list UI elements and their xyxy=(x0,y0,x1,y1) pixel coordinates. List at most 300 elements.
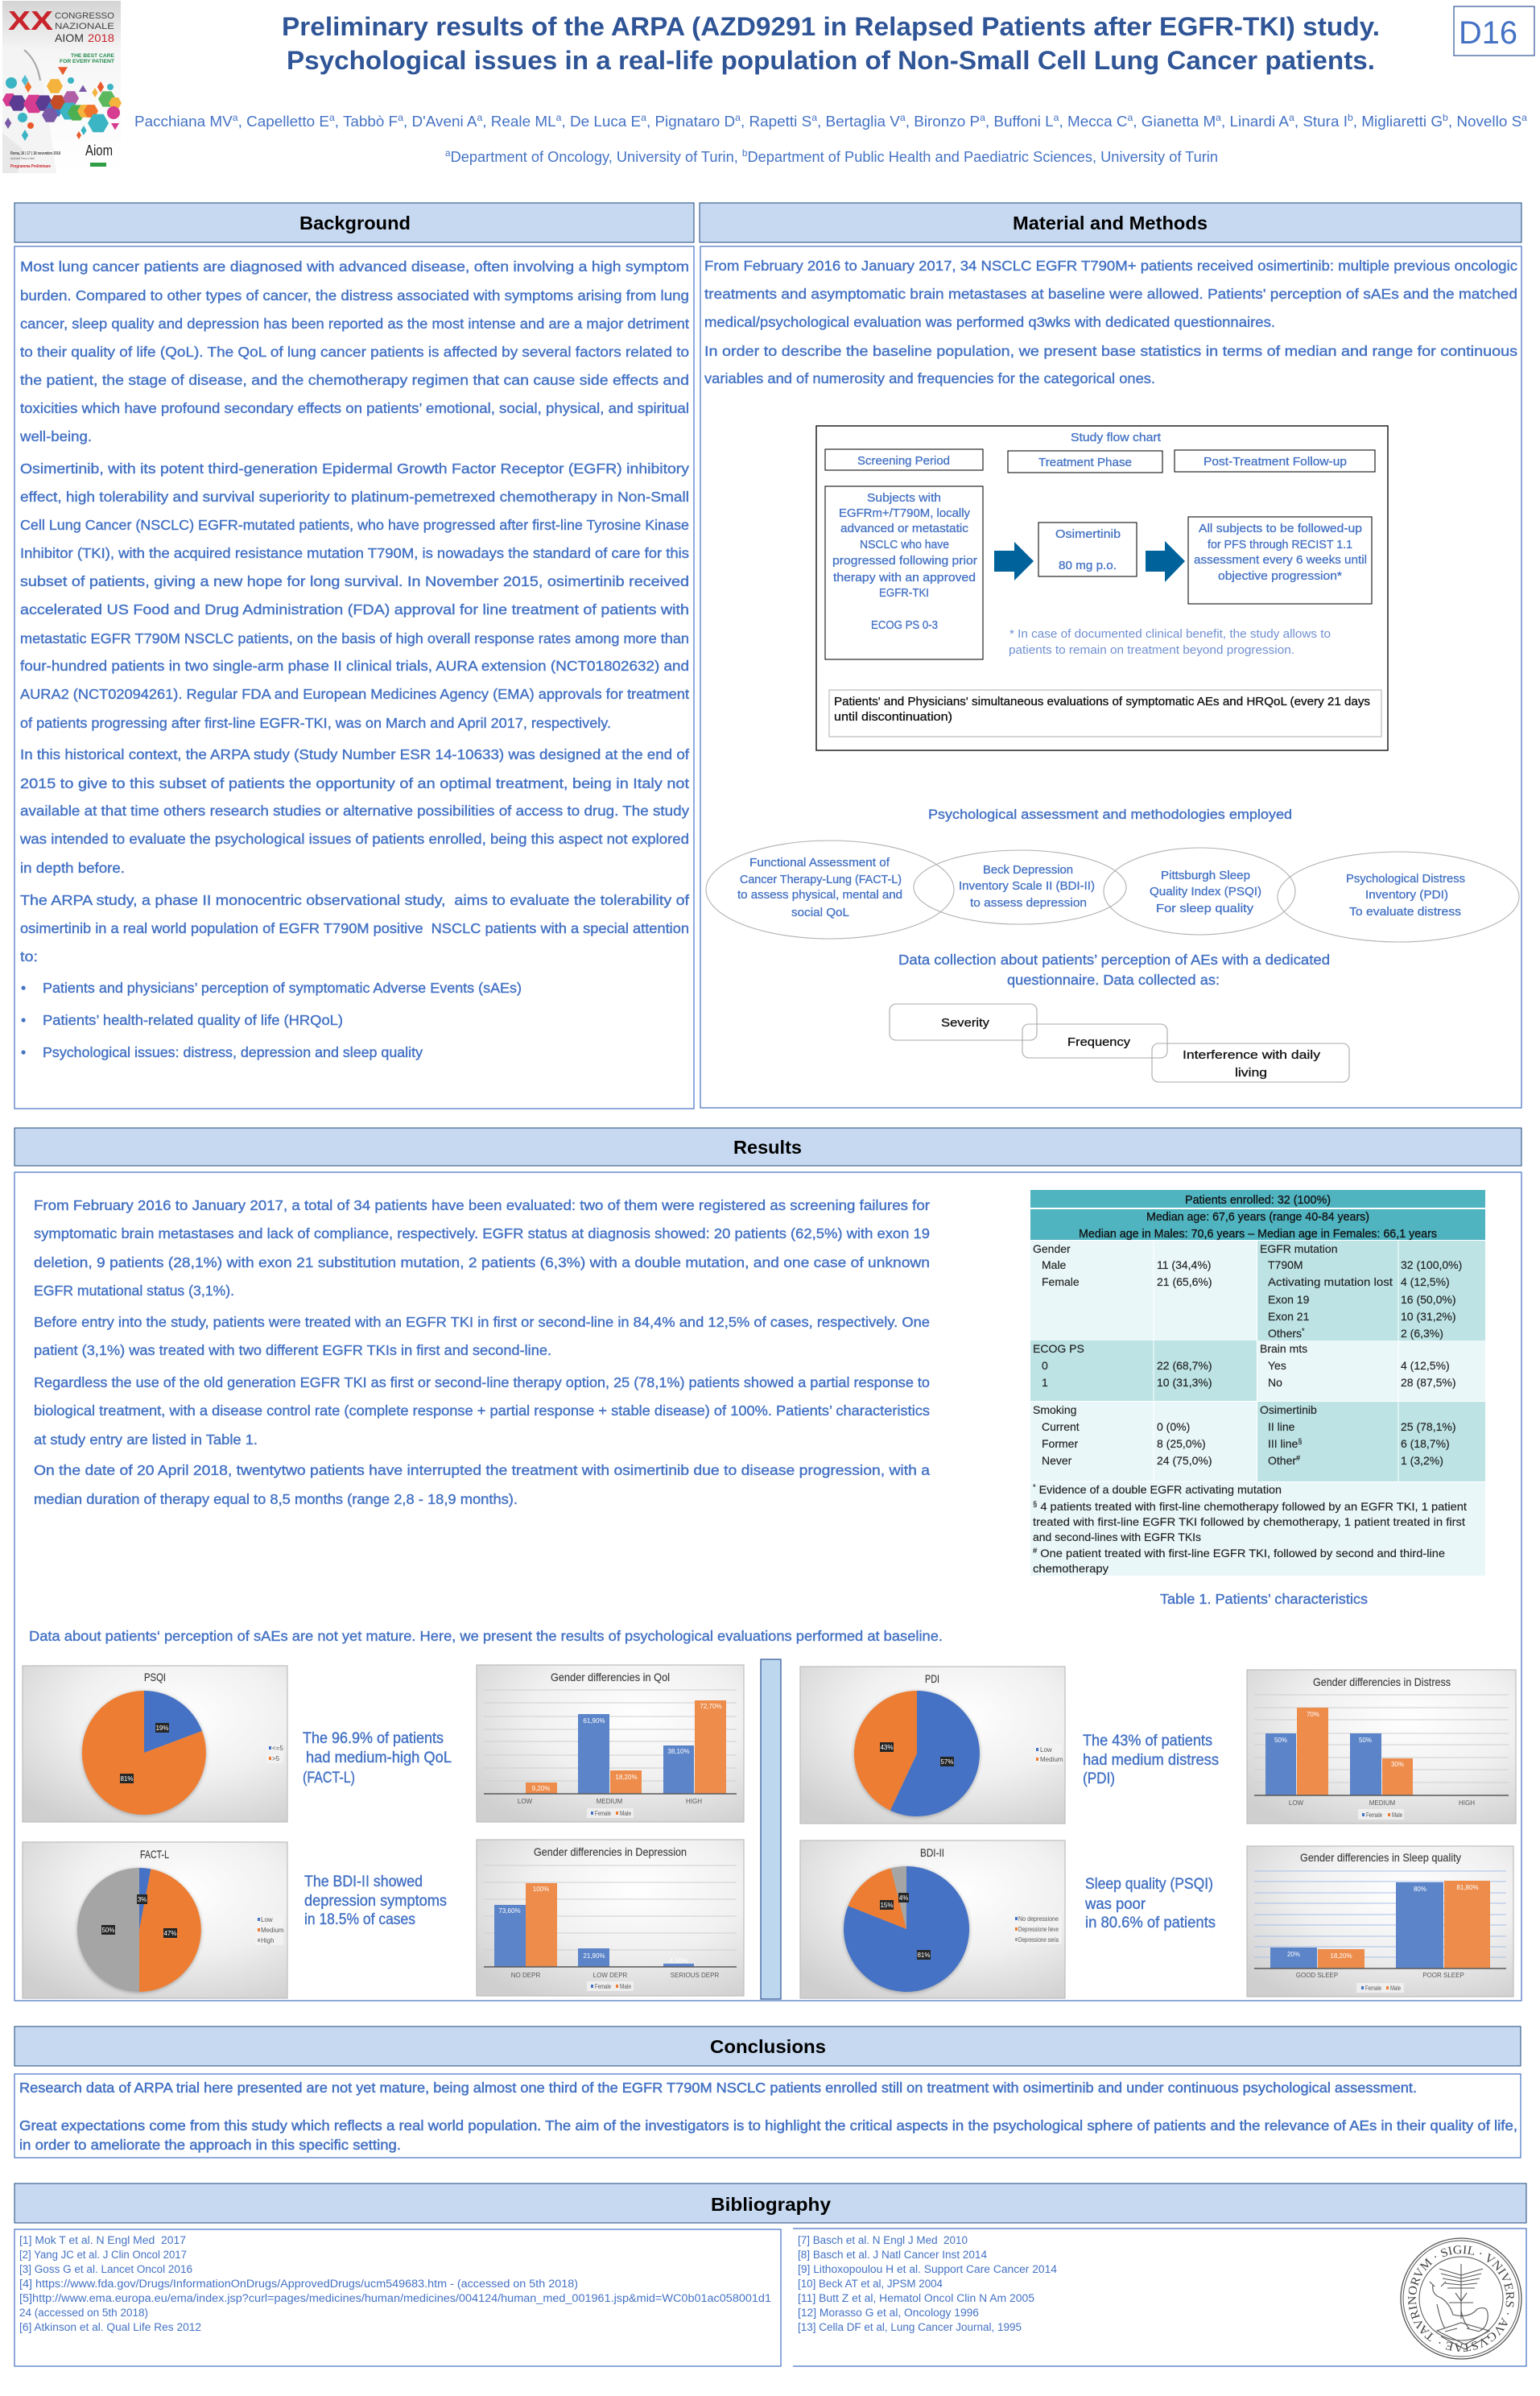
bar chart: gender differences in distress: LOW xyxy=(1289,1799,1304,1807)
box: osimertinib: 80 mg p.o. xyxy=(1059,560,1117,572)
bar chart: gender differences in depression: 100% xyxy=(533,1886,549,1893)
finding: QoL: had medium-high QoL xyxy=(306,1749,452,1766)
pie chart: PDI: Low xyxy=(1040,1746,1052,1754)
table: patients' characteristics: 16 (50,0%) xyxy=(1401,1293,1455,1306)
table: patients' characteristics: Female xyxy=(1042,1275,1080,1288)
affiliations: Department of Public Health and Paediatric Sciences, University of Turin xyxy=(747,148,1218,165)
ellipse: PSQI: Quality Index (PSQI) xyxy=(1150,886,1261,898)
finding: QoL xyxy=(303,1730,452,1787)
title: Psychological issues in a real-life population of Non-Small Cell Lung Cancer patients. xyxy=(287,46,1375,75)
bar chart: gender differences in sleep quality: 81,80% xyxy=(1456,1884,1479,1891)
pie chart: BDI-II: BDI-II xyxy=(920,1846,944,1859)
ellipse: FACT-L: Functional Assessment of xyxy=(749,857,890,870)
conclusions text block: Great expectations come from this study which reflects a real world population. The aim of the investigators is to highlight the critical aspects in the psychological sphere of patients and the relevance of AEs in their quality of life, xyxy=(19,2117,1517,2134)
conference logo: AIOM 2018 cover: AIOM xyxy=(55,31,84,44)
table: patients' characteristics: Evidence of a double EGFR activating mutation xyxy=(1036,1483,1282,1496)
table: patients' characteristics: Exon 21 xyxy=(1268,1310,1310,1323)
table: patients' characteristics: T790M xyxy=(1268,1258,1303,1271)
finding: depression xyxy=(304,1873,447,1928)
ellipse: BDI-II: to assess depression xyxy=(970,897,1087,910)
bar chart: gender differences in depression: Female xyxy=(595,1983,611,1990)
authors: , Linardi A xyxy=(1221,113,1290,130)
conference logo: AIOM 2018 cover: NAZIONALE xyxy=(55,22,114,31)
references: left column: [4] https://www.fda.gov/Drugs/InformationOnDrugs/ApprovedDrugs/ucm549683.htm - (accessed on 5th 2018) xyxy=(19,2278,578,2290)
authors: , Rapetti S xyxy=(741,113,811,130)
bar chart: gender differences in QoL: 72,70% xyxy=(700,1703,722,1710)
background text block: in depth before. xyxy=(20,860,125,876)
table: patients' characteristics: 0 (0%) xyxy=(1157,1420,1190,1433)
authors: a xyxy=(1521,112,1527,123)
ellipse: PDI xyxy=(1278,852,1519,942)
pie chart: PSQI: <=5 xyxy=(272,1745,283,1752)
results text block: Regardless the use of the old generation EGFR TKI as first or second-line therapy option, 25 (78,1%) patients showed a partial response to xyxy=(34,1374,930,1390)
bar chart: gender differences in depression: NO DEPR xyxy=(511,1972,540,1979)
bar chart: gender differences in distress: Male xyxy=(1392,1811,1402,1819)
bar chart: gender differences in depression xyxy=(477,1840,744,1996)
conclusions text block: Research data of ARPA trial here presented are not yet mature, being almost one third of the EGFR T790M NSCLC patients enrolled still on treatment with osimertinib and under continuous psychological assessment. xyxy=(19,2080,1417,2096)
phase: treatment xyxy=(1008,451,1162,473)
table: patients' characteristics: # xyxy=(1033,1547,1037,1555)
finding: distress: had medium distress xyxy=(1083,1752,1219,1769)
authors: a xyxy=(735,112,741,123)
heading: data collection xyxy=(898,952,1330,988)
finding: distress: (PDI) xyxy=(1083,1770,1115,1787)
table: patients' characteristics: 1 (3,2%) xyxy=(1401,1454,1443,1467)
background text block: was intended to evaluate the psychological issues of patients enrolled, being this aspect not explored xyxy=(19,831,689,847)
background text block: • xyxy=(21,980,26,996)
panel: background xyxy=(14,203,694,1109)
heading: background xyxy=(14,203,694,242)
pie chart: PDI: Medium xyxy=(1040,1756,1063,1763)
table: patients' characteristics: 10 (31,3%) xyxy=(1157,1376,1212,1389)
bar chart: gender differences in distress xyxy=(1247,1670,1516,1824)
table: patients' characteristics: 4 (12,5%) xyxy=(1401,1359,1450,1372)
finding: sleep quality xyxy=(1084,1876,1216,1931)
references: right column: [10] Beck AT et al, JPSM 2004 xyxy=(798,2278,943,2290)
references: right column: [8] Basch et al. J Natl Cancer Inst 2014 xyxy=(798,2249,987,2261)
table: patients' characteristics: 24 (75,0%) xyxy=(1157,1454,1212,1467)
background text block: to: xyxy=(20,948,38,965)
authors: , Buffoni L xyxy=(985,113,1054,130)
bar chart: gender differences in distress: HIGH xyxy=(1459,1799,1475,1807)
pie chart: PDI: PDI xyxy=(925,1672,939,1685)
box: interference with daily living: Interference with daily xyxy=(1183,1049,1321,1062)
finding: QoL: (FACT-L) xyxy=(303,1770,355,1787)
table: patients' characteristics: Current xyxy=(1042,1420,1080,1433)
box: follow-up: objective progression* xyxy=(1218,570,1342,583)
authors: a xyxy=(398,112,403,123)
ellipse: PSQI: Pittsburgh Sleep xyxy=(1161,870,1250,882)
authors: , Capelletto E xyxy=(238,113,329,130)
results text block xyxy=(34,1197,930,1507)
bar chart: gender differences in distress: 30% xyxy=(1391,1761,1404,1768)
references: right column: [7] Basch et al. N Engl J Med 2010 xyxy=(798,2234,968,2246)
box: subjects: therapy with an approved xyxy=(833,572,976,585)
table: patients' characteristics: § xyxy=(1298,1437,1302,1445)
background text block: The ARPA study, a phase II monocentric observational study, aims to evaluate the tolerability of xyxy=(20,892,689,908)
pie chart: BDI-II: 81% xyxy=(917,1952,931,1959)
table: patients' characteristics: 2 (6,3%) xyxy=(1401,1327,1443,1340)
bar chart: gender differences in QoL: Gender differencies in Qol xyxy=(551,1671,670,1683)
authors: , Stura I xyxy=(1294,113,1348,130)
background text block: Psychological issues: distress, depression and sleep quality xyxy=(43,1044,423,1060)
bar chart: gender differences in depression: Male xyxy=(620,1983,631,1990)
references: right column xyxy=(793,2229,1526,2366)
phase: post-treatment follow-up: Post-Treatment Follow-up xyxy=(1204,456,1347,469)
background text block: Patients’ health-related quality of life (HRQoL) xyxy=(43,1012,343,1028)
finding: sleep quality: Sleep quality (PSQI) xyxy=(1085,1876,1213,1893)
box: subjects: NSCLC who have xyxy=(860,539,949,551)
pie chart: BDI-II: Depressione seria xyxy=(1018,1936,1059,1944)
box: subjects: EGFRm+/T790M, locally xyxy=(839,507,971,520)
authors: a xyxy=(811,112,817,123)
ellipse: BDI-II: Beck Depression xyxy=(983,864,1073,877)
authors: , Novello S xyxy=(1448,113,1521,130)
table: patients' characteristics: Exon 19 xyxy=(1268,1293,1310,1306)
conference logo: AIOM 2018 cover: Programma Preliminare xyxy=(10,164,51,169)
box: simultaneous evaluations: until discontinuation) xyxy=(834,711,952,724)
finding: depression: depression symptoms xyxy=(304,1893,447,1910)
background text block xyxy=(14,246,694,1109)
pie chart: PSQI: >5 xyxy=(272,1755,280,1762)
bar chart: gender differences in sleep quality: Male xyxy=(1390,1985,1401,1992)
references: left column xyxy=(14,2229,781,2366)
authors: , Mecca C xyxy=(1059,113,1127,130)
bar chart: gender differences in depression: LOW DEPR xyxy=(593,1972,628,1979)
background text block: effect, high tolerability and survival superiority to platinum-pemetrexed chemotherapy in Non-Small xyxy=(20,489,689,505)
bar chart: gender differences in sleep quality: 80% xyxy=(1414,1886,1426,1893)
authors: , D'Aveni A xyxy=(403,113,477,130)
authors: a xyxy=(1289,112,1294,123)
conference logo: AIOM 2018 cover: XX xyxy=(8,6,53,35)
results text block: EGFR mutational status (3,1%). xyxy=(34,1283,234,1299)
box: severity xyxy=(890,1004,1037,1040)
background text block: well-being. xyxy=(19,428,92,444)
panel: bibliography xyxy=(14,2183,1527,2367)
box: subjects: EGFR-TKI xyxy=(879,587,929,600)
ellipse: FACT-L: social QoL xyxy=(791,907,849,919)
footnote: clinical benefit: * In case of documented clinical benefit, the study allows to xyxy=(1009,628,1331,641)
box: osimertinib xyxy=(1038,523,1137,576)
arrow: screening to treatment xyxy=(994,542,1034,580)
table: patients' characteristics: 25 (78,1%) xyxy=(1401,1420,1455,1433)
table: patients' characteristics: 6 (18,7%) xyxy=(1401,1437,1450,1450)
conclusions text block: in order to ameliorate the approach in this specific setting. xyxy=(19,2137,401,2153)
bar chart: gender differences in sleep quality: Female xyxy=(1365,1985,1381,1992)
authors: b xyxy=(1443,112,1448,123)
conclusions text block xyxy=(14,2074,1521,2158)
references: right column: [9] Lithoxopoulou H et al. Support Care Cancer 2014 xyxy=(798,2263,1057,2275)
authors: a xyxy=(1054,112,1059,123)
flow chart heading: Study flow chart xyxy=(1071,432,1161,444)
ellipse: PSQI: For sleep quality xyxy=(1156,903,1254,915)
box: subjects: Subjects with xyxy=(867,492,941,505)
table: patients' characteristics: 1 xyxy=(1042,1376,1048,1389)
finding: distress: The 43% of patients xyxy=(1083,1733,1212,1749)
table: patients' characteristics: 11 (34,4%) xyxy=(1157,1258,1211,1271)
bar chart: gender differences in distress: MEDIUM xyxy=(1369,1799,1396,1807)
table: patients' characteristics: chemotherapy xyxy=(1033,1562,1109,1575)
authors: , Reale ML xyxy=(482,113,556,130)
pie chart: FACT-L: High xyxy=(261,1937,274,1944)
table: patients' characteristics: Smoking xyxy=(1033,1403,1076,1416)
references: right column: [11] Butt Z et al, Hematol Oncol Clin N Am 2005 xyxy=(798,2292,1034,2304)
background text block: Patients and physicians’ perception of symptomatic Adverse Events (sAEs) xyxy=(43,980,522,996)
authors: , Bertaglia V xyxy=(817,113,901,130)
heading: bibliography: Bibliography xyxy=(711,2194,831,2215)
table: patients' characteristics: Yes xyxy=(1268,1359,1286,1372)
heading: material and methods xyxy=(700,203,1521,242)
heading: conclusions xyxy=(14,2026,1521,2066)
table: patients' characteristics: # xyxy=(1296,1454,1300,1462)
ellipse: PDI: Psychological Distress xyxy=(1346,873,1465,886)
authors: a xyxy=(477,112,483,123)
table: patients' characteristics: 4 (12,5%) xyxy=(1401,1275,1450,1288)
ellipse: FACT-L: to assess physical, mental and xyxy=(737,889,902,902)
bar chart: gender differences in QoL: MEDIUM xyxy=(597,1798,623,1805)
ellipse: PDI: To evaluate distress xyxy=(1349,906,1461,919)
bar chart: gender differences in QoL: LOW xyxy=(518,1798,533,1805)
table: patients' characteristics: Never xyxy=(1042,1454,1072,1467)
authors: , Bironzo P xyxy=(906,113,980,130)
references: left column: [5]http://www.ema.europa.eu/ema/index.jsp?curl=pages/medicines/human/medicines/004124/human_med_001961.jsp&mid=WC0b01ac058001d1 xyxy=(19,2292,771,2304)
table: patients' characteristics: EGFR mutation xyxy=(1260,1242,1337,1255)
affiliations: Department of Oncology, University of Turin, xyxy=(451,148,742,165)
pie chart: PDI: 57% xyxy=(940,1758,954,1766)
background text block: of patients progressing after first-line EGFR-TKI, was on March and April 2017, respectively. xyxy=(20,715,611,731)
authors: Pacchiana MV xyxy=(134,113,230,130)
pie chart: FACT-L: 50% xyxy=(101,1927,115,1934)
box: interference with daily living xyxy=(1152,1043,1349,1082)
table: patients' characteristics: * xyxy=(1302,1327,1305,1335)
study flow chart xyxy=(816,426,1388,750)
background text block: AURA2 (NCT02094261). Regular FDA and European Medicines Agency (EMA) approvals for treatment xyxy=(20,686,689,702)
box: subjects: progressed following prior xyxy=(832,555,977,568)
background text block: metastatic EGFR T790M NSCLC patients, on the basis of high overall response rates among more than xyxy=(20,630,689,647)
pie chart: FACT-L: 47% xyxy=(163,1930,177,1937)
authors: a xyxy=(233,112,238,123)
bar chart: gender differences in distress: 50% xyxy=(1359,1737,1372,1744)
affiliations: a xyxy=(445,147,451,159)
box: frequency: Frequency xyxy=(1067,1036,1131,1049)
bar chart: gender differences in distress: Female xyxy=(1366,1811,1382,1819)
bar chart: gender differences in QoL: 38,10% xyxy=(667,1748,690,1755)
table: patients' characteristics: treated with first-line EGFR TKI followed by chemotherapy, 1 patient treated in first xyxy=(1033,1515,1465,1528)
box: follow-up: for PFS through RECIST 1.1 xyxy=(1208,539,1352,551)
table: patients' characteristics: 10 (31,2%) xyxy=(1401,1310,1455,1323)
bar chart: gender differences in depression: 73,60% xyxy=(498,1907,521,1915)
background text block: Cell Lung Cancer (NSCLC) EGFR-mutated patients, who have progressed after first-line Tyrosine Kinase xyxy=(20,517,689,533)
phase: treatment: Treatment Phase xyxy=(1038,456,1132,469)
table: patients' characteristics: 28 (87,5%) xyxy=(1401,1376,1455,1389)
heading: data collection: Data collection about patients’ perception of AEs with a dedicated xyxy=(898,952,1330,968)
ellipse: FACT-L xyxy=(706,841,954,939)
footnote: clinical benefit: patients to remain on treatment beyond progression. xyxy=(1009,644,1294,657)
box: severity: Severity xyxy=(941,1017,990,1030)
pie chart: BDI-II: 15% xyxy=(880,1902,894,1909)
table: patients' characteristics xyxy=(1030,1190,1485,1576)
heading: bibliography xyxy=(14,2183,1526,2223)
authors: , Gianetta M xyxy=(1133,113,1216,130)
intro to psychological evaluations: Data about patients‘ perception of sAEs are not yet mature. Here, we present the results of psychological evaluations performed at baseline. xyxy=(29,1628,943,1644)
methods frame xyxy=(700,246,1521,1108)
box: subjects xyxy=(825,486,983,659)
finding: distress xyxy=(1083,1733,1219,1787)
authors: a xyxy=(900,112,906,123)
bar chart: gender differences in distress: Gender differencies in Distress xyxy=(1313,1675,1451,1688)
background text block: cancer, sleep quality and depression has been reported as the most intense and are a major detriment xyxy=(20,316,689,332)
footnote: clinical benefit xyxy=(1009,628,1331,657)
bar chart: gender differences in sleep quality: Gender differencies in Sleep quality xyxy=(1300,1851,1461,1864)
results text block: On the date of 20 April 2018, twentytwo patients have interrupted the treatment with osimertinib due to disease progression, with a xyxy=(34,1462,930,1478)
results text block: median duration of therapy equal to 8,5 months (range 2,8 - 18,9 months). xyxy=(34,1491,518,1507)
table: patients' characteristics: Osimertinib xyxy=(1260,1403,1317,1416)
bar chart: gender differences in distress: 70% xyxy=(1307,1711,1319,1718)
methods text block: In order to describe the baseline population, we present base statistics in terms of median and range for continuous xyxy=(704,343,1517,359)
heading: psychological assessment: Psychological assessment and methodologies employed xyxy=(928,807,1292,822)
background text block: • xyxy=(21,1044,26,1060)
background text block: the patient, the stage of disease, and the chemotherapy regimen that can cause side effects and xyxy=(20,372,689,388)
references: right column: [13] Cella DF et al, Lung Cancer Journal, 1995 xyxy=(798,2321,1022,2333)
authors: a xyxy=(556,112,562,123)
conference logo: AIOM 2018 cover: Atahotel Parco Hotel xyxy=(10,156,35,160)
phase: post-treatment follow-up xyxy=(1175,450,1375,472)
pie chart: BDI-II: No depressione xyxy=(1018,1915,1059,1923)
poster code D16: D16 xyxy=(1459,15,1517,51)
bar chart: gender differences in sleep quality: GOOD SLEEP xyxy=(1296,1972,1338,1979)
finding: sleep quality: in 80.6% of patients xyxy=(1085,1915,1216,1931)
bar chart: gender differences in QoL: 18,20% xyxy=(615,1774,638,1781)
box: frequency xyxy=(1022,1024,1167,1058)
bar chart: gender differences in QoL: HIGH xyxy=(686,1798,702,1805)
box: follow-up xyxy=(1188,517,1372,604)
authors: a xyxy=(1127,112,1133,123)
finding: depression: The BDI-II showed xyxy=(304,1873,423,1890)
conference logo: AIOM 2018 cover: CONGRESSO xyxy=(55,11,114,21)
results frame xyxy=(14,1172,1521,2001)
table: patients' characteristics: II line xyxy=(1268,1420,1295,1433)
pie chart: FACT-L: Medium xyxy=(261,1927,284,1934)
bar chart: gender differences in sleep quality: 20% xyxy=(1287,1951,1300,1958)
table: patients' characteristics: 22 (68,7%) xyxy=(1157,1359,1212,1372)
table: patients' characteristics: 32 (100,0%) xyxy=(1401,1258,1462,1271)
bar chart: gender differences in depression: 4,50% xyxy=(670,1957,687,1964)
table: patients' characteristics: Other xyxy=(1268,1454,1296,1467)
table: patients' characteristics: and second-lines with EGFR TKIs xyxy=(1033,1531,1201,1543)
bar chart: gender differences in depression: Gender differencies in Depression xyxy=(534,1845,687,1858)
ellipse: PDI: Inventory (PDI) xyxy=(1365,889,1448,902)
background text block: Most lung cancer patients are diagnosed with advanced disease, often involving a high symptom xyxy=(20,258,689,275)
pie chart: PSQI: 81% xyxy=(120,1775,134,1783)
authors: b xyxy=(1348,112,1353,123)
heading: data collection: questionnaire. Data collected as: xyxy=(1007,972,1220,988)
arrow: treatment to follow-up xyxy=(1146,541,1185,582)
background text block: available at that time others research studies or alternative possibilities of access to drug. The study xyxy=(20,803,689,819)
table: patients' characteristics: 0 xyxy=(1042,1359,1048,1372)
table: patients' characteristics: Others xyxy=(1268,1327,1302,1340)
table: patients' characteristics: One patient treated with first-line EGFR TKI, followed by second and third-line xyxy=(1037,1547,1445,1559)
authors: , Pignataro D xyxy=(646,113,735,130)
bar chart: gender differences in depression: 21,90% xyxy=(583,1952,605,1960)
methods text block: medical/psychological evaluation was performed q3wks with dedicated questionnaires. xyxy=(704,314,1275,330)
results text block: deletion, 9 patients (28,1%) with exon 21 substitution mutation, 2 patients (6,3%) with a double mutation, and one case of unknown xyxy=(34,1254,930,1270)
heading: results xyxy=(14,1128,1521,1166)
heading: background: Background xyxy=(299,213,411,233)
methods text block: From February 2016 to January 2017, 34 NSCLC EGFR T790M+ patients received osimertinib: multiple previous oncologic xyxy=(704,258,1517,274)
table: patients' characteristics: 21 (65,6%) xyxy=(1157,1275,1212,1288)
title: Preliminary results of the ARPA (AZD9291 in Relapsed Patients after EGFR-TKI) study. xyxy=(282,12,1380,41)
panel: results xyxy=(14,1128,1521,2001)
pie chart: FACT-L: 3% xyxy=(138,1896,147,1903)
methods text block: variables and of numerosity and frequencies for the categorical ones. xyxy=(704,370,1155,386)
conference logo: AIOM 2018 cover: FOR EVERY PATIENT xyxy=(60,59,114,64)
table: patients' characteristics: III line xyxy=(1268,1437,1298,1450)
bar chart: gender differences in QoL: Male xyxy=(620,1810,631,1817)
authors: a xyxy=(980,112,985,123)
title xyxy=(282,12,1380,75)
pie chart: PSQI: PSQI xyxy=(144,1671,166,1683)
table: patients' characteristics: Gender xyxy=(1033,1242,1071,1255)
ellipse: BDI-II: Inventory Scale II (BDI-II) xyxy=(959,880,1095,893)
heading: results: Results xyxy=(733,1137,802,1158)
box: simultaneous evaluations xyxy=(829,690,1381,737)
bar chart: gender differences in sleep quality: 18,20% xyxy=(1330,1952,1352,1960)
results text block: at study entry are listed in Table 1. xyxy=(34,1431,258,1448)
panel: material and methods xyxy=(700,203,1521,1108)
heading: material and methods: Material and Methods xyxy=(1013,213,1208,233)
pie chart: BDI-II: Depressione lieve xyxy=(1018,1926,1059,1933)
table: patients' characteristics: Male xyxy=(1042,1258,1067,1271)
table: patients' characteristics: No xyxy=(1268,1376,1282,1389)
phase: screening period xyxy=(825,449,983,470)
background text block: In this historical context, the ARPA study (Study Number ESR 14-10633) was designed at the end of xyxy=(20,746,689,762)
conference logo: AIOM 2018 cover: Roma, 16 | 17 | 18 novembre 2018 xyxy=(10,151,60,156)
table: patients' characteristics: 4 patients treated with first-line chemotherapy followed by an EGFR TKI, 1 patient xyxy=(1037,1500,1467,1513)
conference logo: AIOM 2018 cover: Aiom xyxy=(85,143,113,159)
references: left column: [1] Mok T et al. N Engl Med 2017 xyxy=(19,2234,186,2246)
methods text block: treatments and asymptomatic brain metastases at baseline were allowed. Patients' perception of sAEs and the matched xyxy=(704,286,1517,302)
background text block: Inhibitor (TKI), with the acquired resistance mutation T790M, is nowadays the standard of care for this xyxy=(20,545,689,561)
ellipse: FACT-L: Cancer Therapy-Lung (FACT-L) xyxy=(740,874,902,886)
pie chart: BDI-II xyxy=(800,1840,1065,1998)
table: patients' characteristics: § xyxy=(1033,1500,1037,1508)
authors: , Tabbò F xyxy=(335,113,398,130)
background text block: accelerated US Food and Drug Administration (FDA) approval for line treatment of patients with xyxy=(20,601,689,618)
background text block: • xyxy=(21,1012,26,1028)
results text block: Before entry into the study, patients were treated with an EGFR TKI in first or second-line in 84,4% and 12,5% of cases, respectively. One xyxy=(34,1314,930,1330)
bar chart: gender differences in QoL: 9,20% xyxy=(532,1785,550,1792)
pie chart: FACT-L: FACT-L xyxy=(140,1848,169,1861)
results text block: symptomatic brain metastases and lack of compliance, respectively. EGFR status at diagnosis showed: 20 patients (62,5%) with exon 19 xyxy=(34,1225,930,1241)
references: left column: [6] Atkinson et al. Qual Life Res 2012 xyxy=(19,2321,201,2333)
results text block: biological treatment, with a disease control rate (complete response + partial response + stable disease) of 100%. Patients’ characteristics xyxy=(34,1402,930,1419)
finding: sleep quality: was poor xyxy=(1084,1896,1146,1913)
authors: a xyxy=(329,112,335,123)
background text block: subset of patients, giving a new hope for long survival. In November 2015, osimertinib received xyxy=(20,573,689,589)
bar chart: gender differences in QoL xyxy=(477,1665,744,1822)
authors: a xyxy=(641,112,646,123)
table: patients' characteristics: * xyxy=(1033,1483,1036,1491)
poster code D16 xyxy=(1454,6,1534,56)
background text block: osimertinib in a real world population of EGFR T790M positive NSCLC patients with a special attention xyxy=(20,920,689,936)
authors: , Migliaretti G xyxy=(1353,113,1443,130)
centre divider bar xyxy=(761,1659,781,1999)
references: left column: [3] Goss G et al. Lancet Oncol 2016 xyxy=(19,2263,192,2275)
bar chart: gender differences in distress: 50% xyxy=(1274,1737,1287,1744)
table: patients' characteristics: Median age: 67,6 years (range 40-84 years) xyxy=(1146,1210,1369,1224)
box: subjects: ECOG PS 0-3 xyxy=(871,619,938,632)
affiliations: b xyxy=(742,147,748,159)
